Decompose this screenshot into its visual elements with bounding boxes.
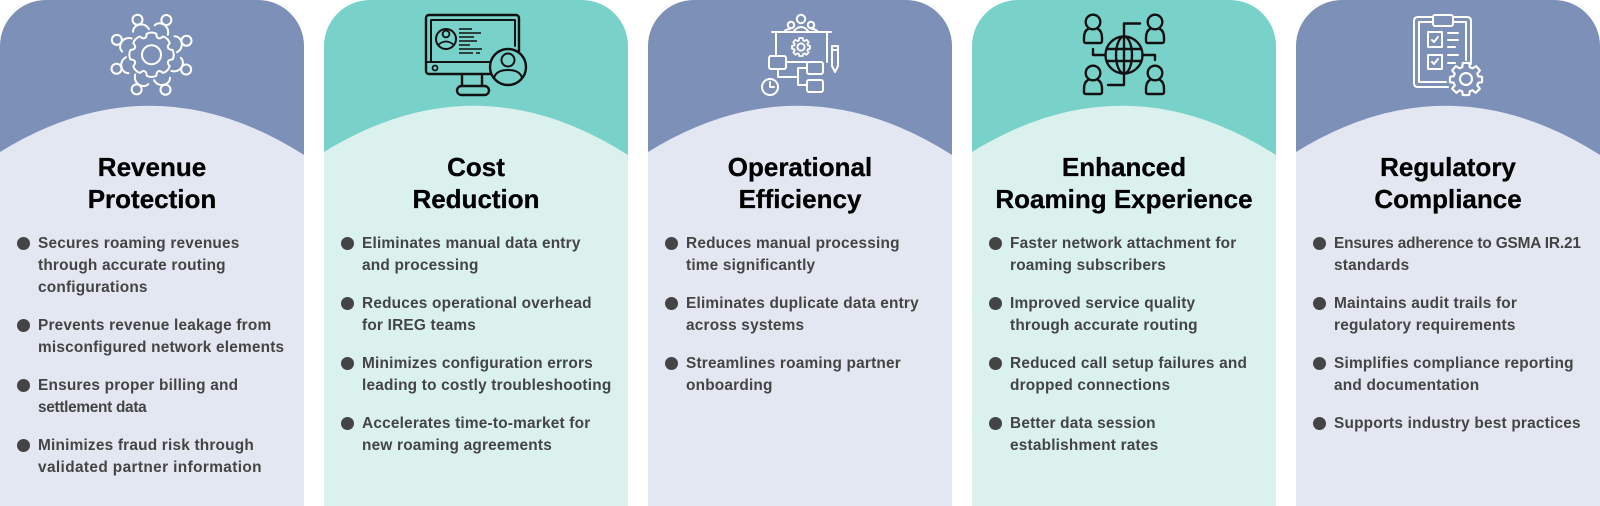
heading: enhanced roaming experience: [995, 152, 1253, 214]
curved light background: [0, 106, 304, 506]
heading: enhanced roaming experience: Enhanced: [1062, 152, 1186, 182]
bullet item: [341, 414, 590, 454]
bullet item: settlement data: [38, 398, 146, 416]
bullet list: [989, 234, 1247, 454]
curved light background: [648, 106, 952, 506]
heading: cost reduction: Cost: [447, 152, 505, 182]
bullet item: Maintains audit trails for: [1334, 294, 1517, 312]
bullet item: Ensures adherence to GSMA IR.21: [1334, 234, 1581, 252]
icon: clipboard with gear: [1413, 14, 1484, 96]
bullet item: [665, 354, 901, 394]
bullet item: Minimizes fraud risk through: [38, 436, 254, 454]
curved light background: [1296, 106, 1600, 506]
panel: enhanced roaming experience: [972, 0, 1276, 506]
bullet item: [1313, 294, 1517, 334]
bullet item: [1313, 234, 1581, 274]
bullet item: new roaming agreements: [362, 436, 552, 454]
bullet list: [665, 234, 919, 394]
bullet item: [989, 354, 1247, 394]
heading: enhanced roaming experience: Roaming Experience: [995, 184, 1253, 214]
bullet item: and processing: [362, 256, 479, 274]
bullet item: misconfigured network elements: [38, 338, 284, 356]
bullet item: leading to costly troubleshooting: [362, 376, 611, 394]
bullet item: [17, 436, 262, 476]
panel: cost reduction: [324, 0, 628, 506]
bullet item: [665, 294, 919, 334]
bullet item: Faster network attachment for: [1010, 234, 1236, 252]
panel: operational efficiency: [648, 0, 952, 506]
heading: revenue protection: [88, 152, 216, 214]
heading: operational efficiency: Efficiency: [739, 184, 861, 214]
bullet item: [1313, 354, 1574, 394]
panel: regulatory compliance: [1296, 0, 1600, 506]
bullet item: Accelerates time-to-market for: [362, 414, 590, 432]
bullet item: regulatory requirements: [1334, 316, 1516, 334]
bullet item: [989, 234, 1236, 274]
bullet item: for IREG teams: [362, 316, 476, 334]
bullet item: [341, 294, 592, 334]
bullet item: Ensures proper billing and: [38, 376, 238, 394]
icon: monitor with user: [424, 14, 528, 96]
heading: regulatory compliance: [1374, 152, 1522, 214]
bullet item: onboarding: [686, 376, 773, 394]
heading: operational efficiency: Operational: [728, 152, 872, 182]
bullet item: [341, 234, 581, 274]
bullet item: configurations: [38, 278, 148, 296]
bullet list: [17, 234, 284, 476]
bullet item: Minimizes configuration errors: [362, 354, 593, 372]
bullet item: Simplifies compliance reporting: [1334, 354, 1574, 372]
bullet item: dropped connections: [1010, 376, 1170, 394]
icon: globe with users: [1082, 14, 1166, 96]
heading: regulatory compliance: Compliance: [1374, 184, 1522, 214]
bullet item: [17, 376, 238, 416]
bullet item: Reduced call setup failures and: [1010, 354, 1247, 372]
panel: revenue protection: [0, 0, 304, 506]
bullet item: Eliminates manual data entry: [362, 234, 581, 252]
bullet item: through accurate routing: [1010, 316, 1198, 334]
bullet item: standards: [1334, 256, 1409, 274]
bullet item: Prevents revenue leakage from: [38, 316, 271, 334]
bullet item: through accurate routing: [38, 256, 226, 274]
icon: workflow board: [761, 14, 839, 96]
heading: cost reduction: Reduction: [412, 184, 540, 214]
bullet list: [1313, 234, 1581, 432]
bullet item: [989, 414, 1158, 454]
bullet item: [17, 316, 284, 356]
bullet item: [989, 294, 1198, 334]
icon: people around gear: [110, 14, 192, 96]
heading: revenue protection: Revenue: [98, 152, 206, 182]
bullet item: Better data session: [1010, 414, 1156, 432]
bullet item: roaming subscribers: [1010, 256, 1166, 274]
bullet item: [341, 354, 611, 394]
bullet item: establishment rates: [1010, 436, 1158, 454]
bullet list: [341, 234, 611, 454]
bullet item: Secures roaming revenues: [38, 234, 240, 252]
heading: cost reduction: [412, 152, 540, 214]
curved light background: [324, 106, 628, 506]
bullet item: Supports industry best practices: [1334, 414, 1581, 432]
bullet item: Reduces operational overhead: [362, 294, 592, 312]
bullet item: Improved service quality: [1010, 294, 1195, 312]
bullet item: [665, 234, 900, 274]
heading: regulatory compliance: Regulatory: [1380, 152, 1516, 182]
bullet item: validated partner information: [38, 458, 262, 476]
bullet item: time significantly: [686, 256, 815, 274]
bullet item: Eliminates duplicate data entry: [686, 294, 919, 312]
heading: operational efficiency: [728, 152, 872, 214]
bullet item: and documentation: [1334, 376, 1479, 394]
bullet item: across systems: [686, 316, 804, 334]
bullet item: [17, 234, 240, 296]
bullet item: Streamlines roaming partner: [686, 354, 901, 372]
curved light background: [972, 106, 1276, 506]
bullet item: Reduces manual processing: [686, 234, 900, 252]
heading: revenue protection: Protection: [88, 184, 216, 214]
